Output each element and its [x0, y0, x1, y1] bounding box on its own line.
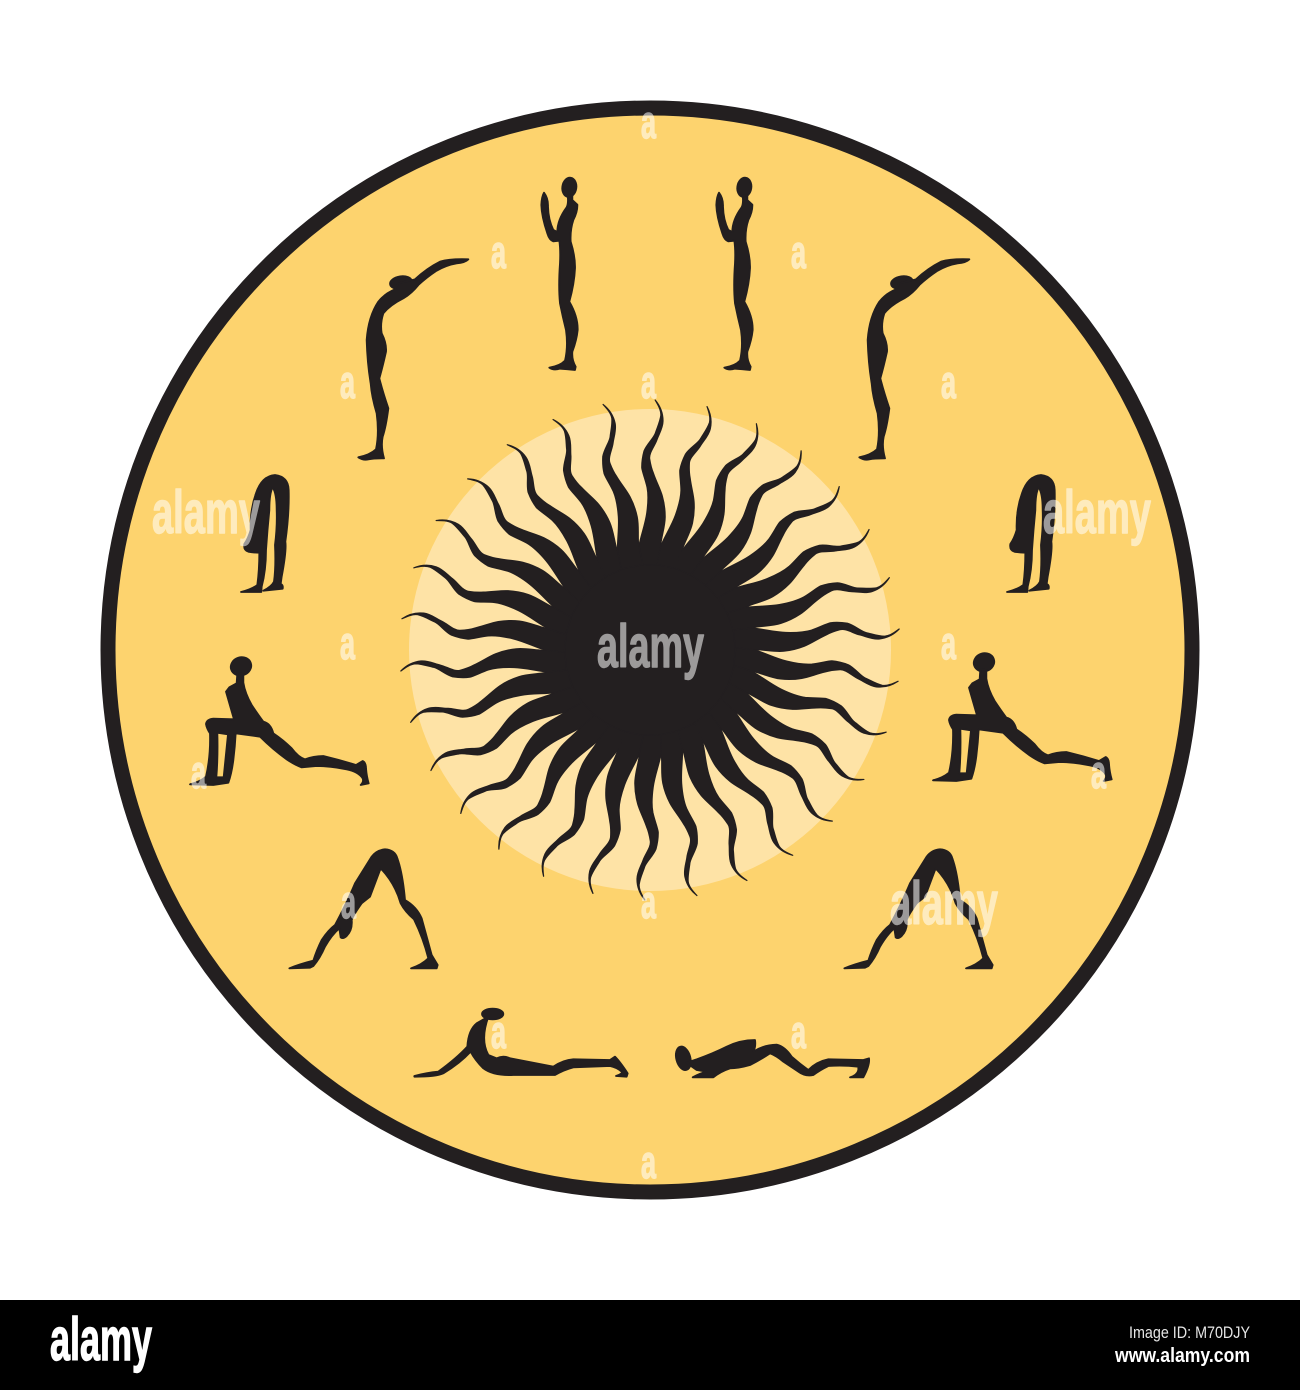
- yellow disc with black ring: [108, 108, 1192, 1192]
- pose: downward dog, left: [289, 849, 438, 968]
- watermarks: a: [191, 746, 206, 798]
- watermarks: a: [341, 876, 356, 928]
- pose: raised arms backbend, right: [859, 259, 969, 460]
- pose: low lunge, left: [190, 655, 369, 785]
- watermarks: alamy: [1043, 479, 1151, 546]
- pose: cobra: [414, 1009, 628, 1077]
- watermarks: a: [791, 226, 806, 278]
- watermarks: a: [340, 356, 355, 408]
- pose: standing prayer, right: [716, 177, 753, 370]
- pose: downward dog, right: [844, 849, 993, 968]
- watermarks: alamy: [597, 613, 704, 680]
- watermarks: a: [641, 96, 656, 148]
- watermarks: a: [941, 617, 956, 669]
- watermarks: a: [941, 356, 956, 408]
- pose: raised arms backbend, left: [358, 259, 468, 460]
- website: www.alamy.com: [1114, 1345, 1250, 1367]
- watermarks: a: [491, 226, 506, 278]
- watermarks: a: [641, 356, 656, 408]
- watermarks: a: [791, 1006, 806, 1058]
- pose: standing prayer, left: [541, 177, 578, 370]
- watermarks: alamy: [890, 870, 998, 937]
- pose: forward fold, right: [1007, 475, 1055, 592]
- watermarks: a: [340, 617, 355, 669]
- pose: eight-limbed plank: [673, 1040, 869, 1077]
- footer logo: alamy: [50, 1306, 152, 1373]
- pose: low lunge, right: [933, 651, 1112, 781]
- watermarks: alamy: [152, 479, 260, 546]
- footer bar: [0, 1300, 1300, 1390]
- image id: Image ID: M70DJY: [1129, 1323, 1250, 1342]
- watermarks: [152, 96, 1151, 1188]
- sun: pale halo and black wavy rays: [400, 400, 900, 900]
- pose: forward fold, left: [241, 475, 289, 592]
- watermarks: a: [491, 1006, 506, 1058]
- watermarks: a: [641, 1136, 656, 1188]
- watermarks: a: [641, 876, 656, 928]
- watermarks: a: [1091, 746, 1106, 798]
